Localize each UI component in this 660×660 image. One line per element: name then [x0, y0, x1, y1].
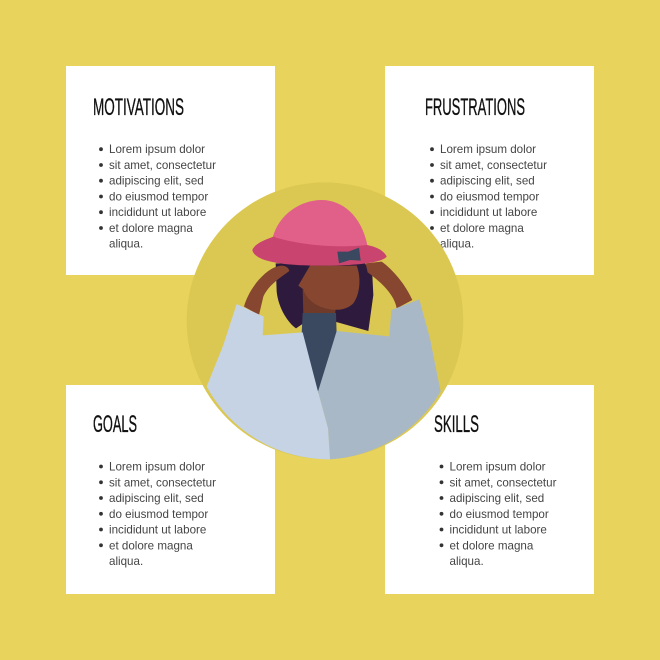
list: frustrations: incididunt ut labore [440, 206, 537, 219]
heading: goals: GOALS [93, 411, 137, 438]
list: motivations: incididunt ut labore [109, 206, 206, 219]
panel: motivations [66, 66, 275, 275]
icon: right arm [366, 262, 412, 308]
heading: motivations: MOTIVATIONS [93, 94, 184, 121]
list: skills: et dolore magna [450, 539, 534, 552]
list: skills: adipiscing elit, sed [450, 492, 544, 505]
list: skills: aliqua. [450, 555, 484, 568]
panel: goals [66, 385, 275, 594]
list: motivations: Lorem ipsum dolor [109, 143, 205, 156]
icon: coat right [318, 299, 441, 459]
panel: skills [385, 385, 594, 594]
list: skills: incididunt ut labore [450, 524, 547, 536]
circle backdrop [187, 182, 463, 459]
icon: neck [303, 289, 337, 314]
list: goals: sit amet, consectetur [109, 476, 216, 489]
list: goals: do eiusmod tempor [109, 508, 208, 521]
list: skills [440, 460, 557, 568]
list: goals: aliqua. [109, 555, 143, 568]
list: frustrations: aliqua. [440, 238, 474, 250]
list: goals: incididunt ut labore [109, 524, 206, 536]
head and hat [244, 200, 412, 331]
list: motivations: adipiscing elit, sed [109, 174, 204, 188]
heading: frustrations: FRUSTRATIONS [425, 94, 525, 121]
list: motivations: et dolore magna [109, 222, 193, 235]
icon: hat crown [273, 200, 368, 247]
list: frustrations [430, 143, 547, 250]
icon: coat left [207, 304, 330, 459]
icon: hat brim [252, 237, 387, 266]
portrait circle [187, 182, 463, 459]
list: frustrations: Lorem ipsum dolor [440, 143, 536, 156]
list: frustrations: et dolore magna [440, 222, 524, 235]
list: goals [99, 460, 216, 568]
list: frustrations: adipiscing elit, sed [440, 174, 535, 188]
icon: left arm [244, 266, 289, 315]
list: frustrations: do eiusmod tempor [440, 190, 539, 203]
icon: hat bow [337, 248, 361, 263]
list: motivations: do eiusmod tempor [109, 190, 208, 203]
list: goals: Lorem ipsum dolor [109, 460, 205, 474]
list: frustrations: sit amet, consectetur [440, 159, 547, 172]
list: goals: adipiscing elit, sed [109, 492, 204, 505]
icon: face [298, 266, 359, 310]
list: motivations: aliqua. [109, 238, 143, 250]
list: motivations: sit amet, consectetur [109, 159, 216, 172]
list: skills: sit amet, consectetur [450, 476, 557, 489]
icon: hair [276, 263, 373, 331]
icon: shirt [302, 313, 337, 393]
list: motivations [99, 143, 216, 250]
list: skills: Lorem ipsum dolor [450, 460, 546, 474]
heading: skills: SKILLS [434, 411, 479, 438]
list: goals: et dolore magna [109, 539, 193, 552]
panel: frustrations [385, 66, 594, 275]
list: skills: do eiusmod tempor [450, 508, 549, 521]
body [207, 299, 441, 459]
